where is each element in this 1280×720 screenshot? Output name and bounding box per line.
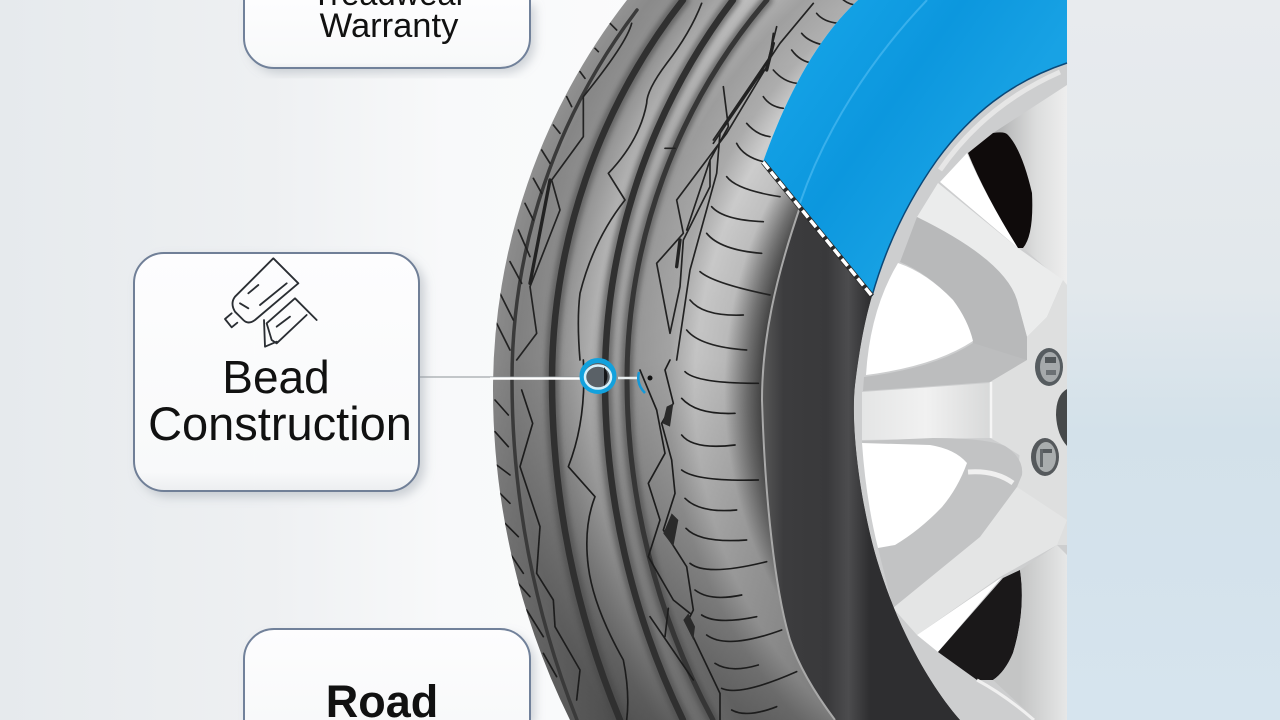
thick crack shapes (663, 403, 695, 640)
dashed cut line (763, 162, 872, 296)
crack cluster lower (640, 360, 720, 720)
spoke: lower shaded top (862, 438, 1022, 608)
spoke: upper diagonal shaded face (900, 217, 1027, 360)
card: Treadwear Warranty (244, 0, 530, 68)
tire (493, 0, 960, 720)
label: Treadwear Warranty: Warranty (320, 7, 459, 45)
central zigzag crack upper (578, 3, 702, 360)
shoulder sipes upper left (497, 23, 617, 350)
blue section inner edge (872, 63, 1067, 296)
spoke: horizontal light face (862, 383, 990, 440)
label: Bead Construction: Bead (222, 351, 330, 403)
card: Bead Construction (134, 253, 419, 491)
spoke: lower diagonal light (893, 487, 1067, 635)
sipes and cracks, upper half (497, 0, 857, 360)
lug bolt: lower (1031, 438, 1059, 476)
rim upper wall (993, 85, 1067, 290)
wheel opening: second white (866, 263, 973, 375)
wheel opening: bottom white (917, 577, 1002, 652)
shoulder sipes lower left (495, 400, 557, 677)
rim ring highlight (940, 72, 1060, 170)
circumferential grooves (512, 0, 767, 720)
spoke: upper diagonal light face (917, 183, 1063, 337)
blue section seam (800, 0, 927, 203)
wheel opening: third white (862, 443, 967, 548)
icon: bead tubes (225, 258, 317, 347)
marker tail (618, 377, 637, 379)
rim base (854, 63, 1067, 720)
wheel opening: top black (968, 132, 1032, 248)
rim lower wall (993, 545, 1067, 720)
marker ring (582, 360, 614, 392)
hub face between spokes (990, 360, 1027, 460)
label: Bead Construction: Construction (148, 397, 412, 450)
callout connector and marker (420, 360, 652, 393)
wheel opening: bottom black (938, 570, 1022, 680)
shoulder sipes lower right (682, 372, 797, 713)
label: Bead Construction (148, 351, 412, 450)
tread base (493, 0, 960, 720)
centre bore (1056, 389, 1067, 446)
sidewall light seam (762, 207, 835, 720)
connector line (420, 376, 584, 378)
wheel opening: top white (940, 153, 1018, 248)
sidewall (762, 207, 960, 720)
shoulder sipes upper right (687, 0, 857, 350)
blue highlighted sidewall section (763, 0, 1067, 296)
spoke: horizontal shaded top (863, 343, 1027, 391)
hub plate (1017, 280, 1067, 545)
card: Road (244, 629, 530, 720)
wheel rim (854, 63, 1067, 720)
lug bolt: upper (1035, 348, 1063, 386)
left zigzag crack lower (520, 390, 580, 700)
sipes and cracks, lower half (495, 360, 797, 720)
left zigzag crack upper (517, 23, 632, 360)
central zigzag crack lower (568, 360, 628, 720)
crack cluster upper (657, 3, 813, 360)
